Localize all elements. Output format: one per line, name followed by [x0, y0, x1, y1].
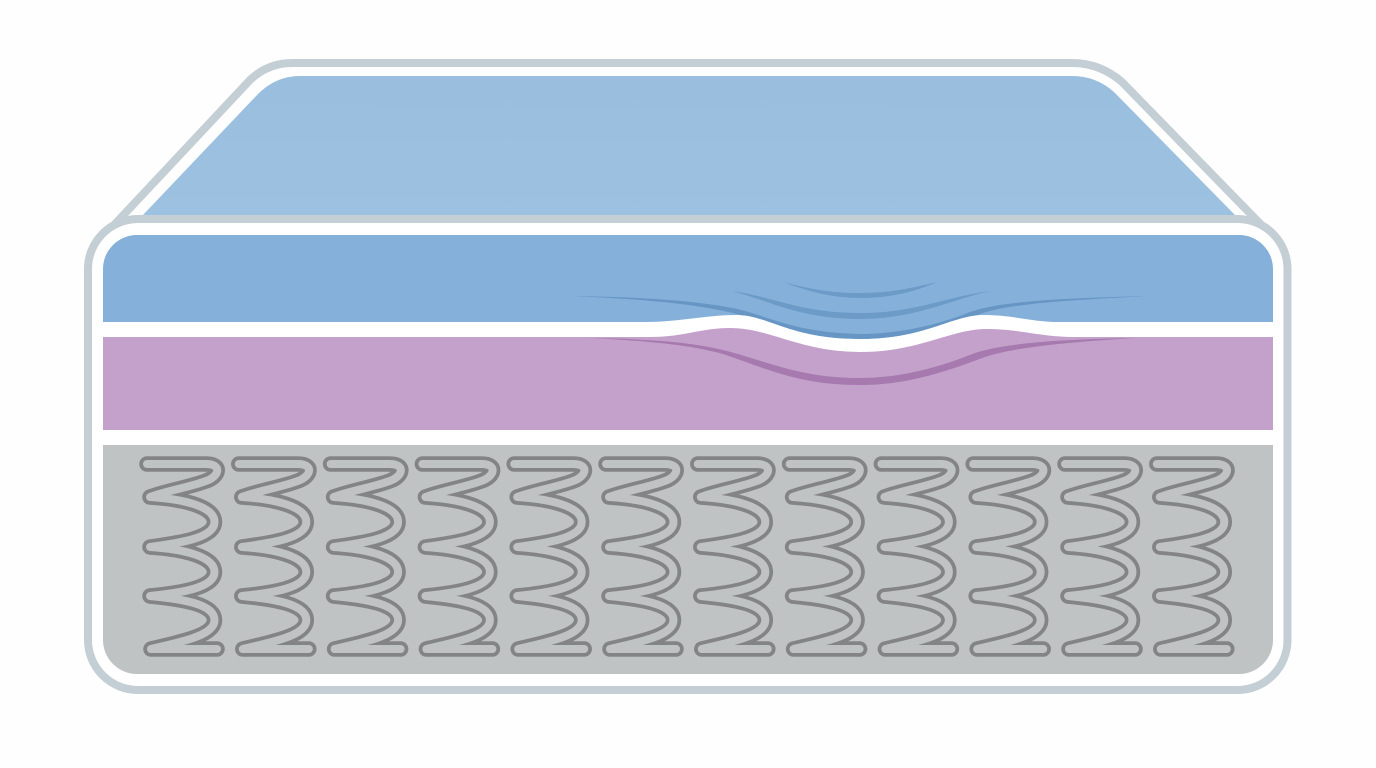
top surface of mattress [100, 63, 1276, 240]
spring coil 3 [331, 464, 401, 649]
purple foam panel [103, 328, 1273, 430]
grey spring panel [103, 445, 1273, 674]
top surface frame outline [100, 63, 1276, 240]
spring layer [103, 445, 1273, 674]
compression line: middle [732, 291, 990, 319]
spring coil 8 [790, 464, 860, 649]
blue foam panel [103, 235, 1273, 339]
spring coil 11 [1065, 464, 1135, 649]
spring coil 1 [147, 464, 217, 649]
front frame outline [88, 219, 1288, 690]
spring coil 5 [514, 464, 584, 649]
mattress cross-section illustration [84, 59, 1292, 694]
spring coil 6 [606, 464, 676, 649]
compression line: lower [571, 296, 1148, 340]
spring coil 7 [698, 464, 768, 649]
compression line: upper [783, 282, 937, 298]
purple foam layer [103, 328, 1273, 430]
spring coil 10 [973, 464, 1043, 649]
spring coil 9 [881, 464, 952, 649]
top surface blue panel [142, 76, 1236, 216]
spring coil 4 [422, 464, 493, 649]
spring coil 2 [239, 464, 309, 649]
compression line: purple [590, 338, 1136, 385]
blue foam layer [103, 235, 1273, 340]
spring coil 12 [1157, 464, 1227, 649]
